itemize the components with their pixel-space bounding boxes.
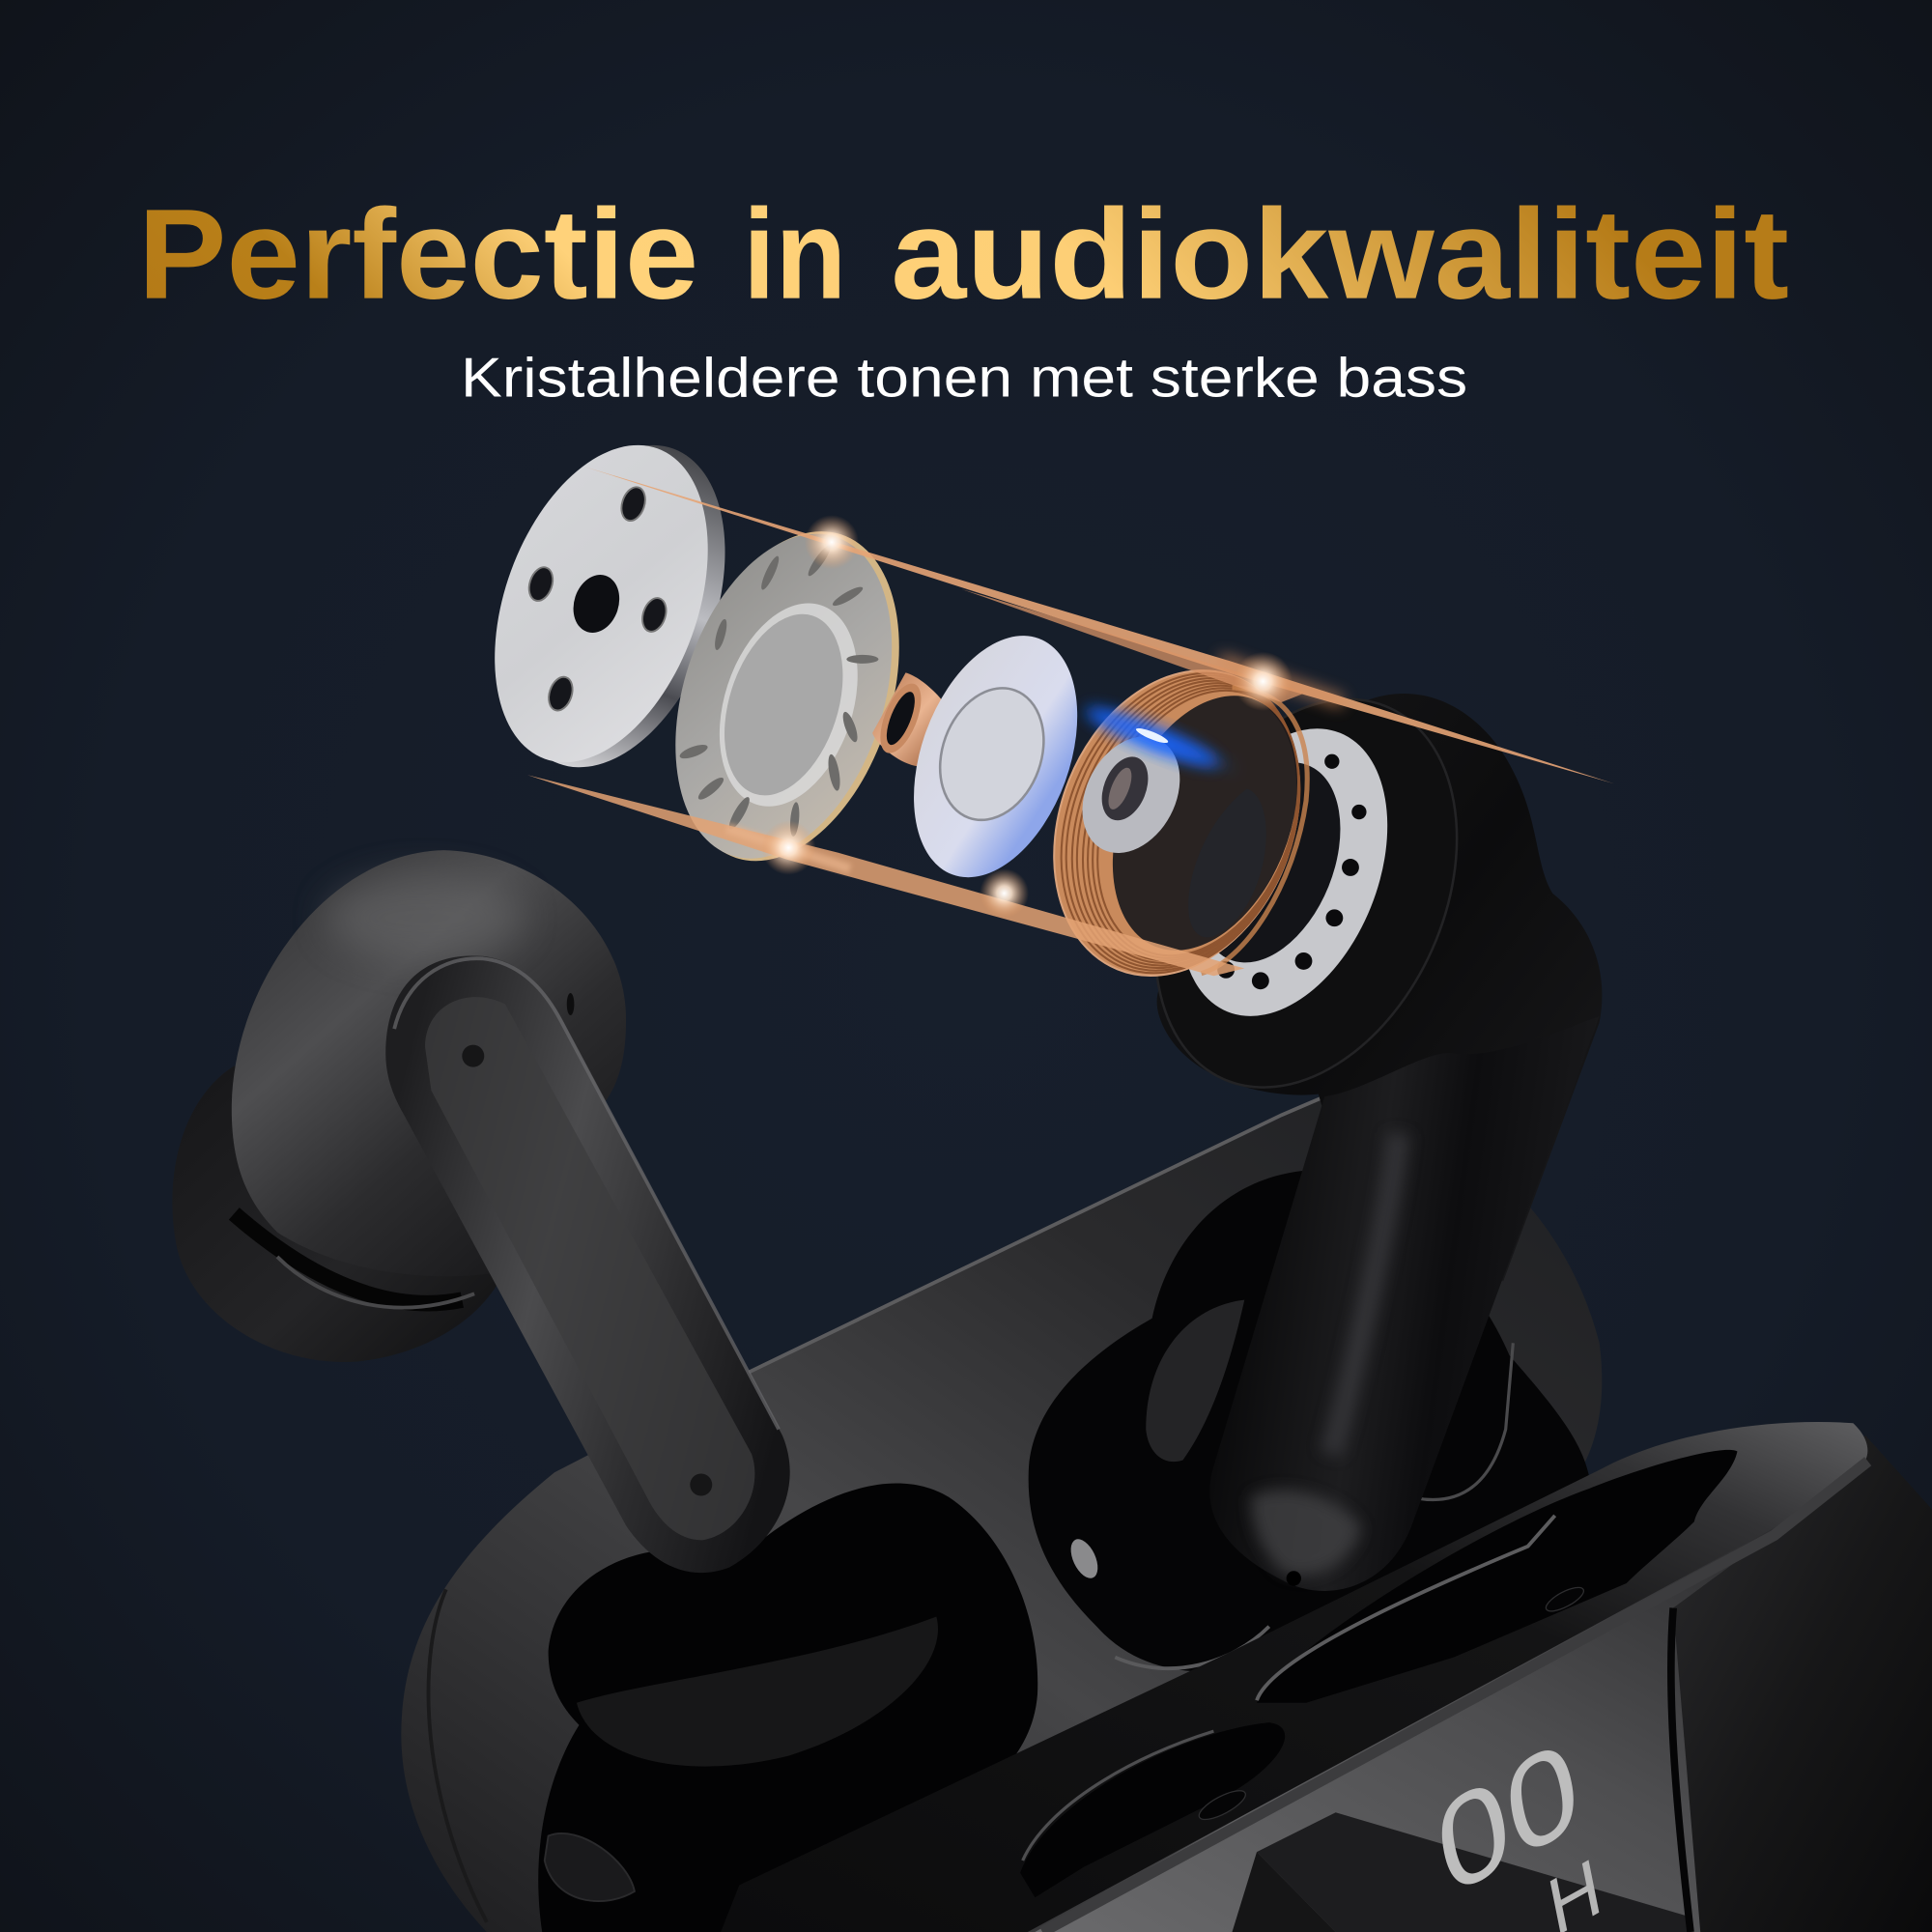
earbud head [1157,694,1602,1282]
rear earbud slot [1257,1450,1737,1703]
copper voice coil [1010,634,1343,1012]
charging case base [721,1422,1932,1932]
right cavity [1029,1171,1589,1672]
stem sensor dots [462,1045,484,1067]
plate seen through coil [1188,788,1266,937]
silver ring [1063,720,1199,870]
front earbud slot [1020,1722,1285,1897]
right cavity small vent [1065,1535,1103,1582]
left cavity highlight [577,1616,938,1767]
earbud stem [1209,1016,1600,1591]
disc fins [678,543,878,837]
glow points [805,515,859,569]
right cavity rim line [1115,1627,1269,1668]
right cavity highlight [1146,1300,1244,1462]
divider groove [1671,1608,1690,1932]
copper light beams [527,467,1614,976]
sound port [1287,1571,1301,1586]
left cavity [538,1483,1037,1932]
tray latch marks [1543,1583,1587,1616]
coil front arc [1202,688,1307,974]
copper cylinder [872,672,955,766]
silver perforated disc [455,415,766,797]
earbud head [232,850,626,1276]
earbud stem [385,955,790,1573]
ear tip [172,1065,499,1362]
white dome disc [883,613,1108,900]
right earbud [1097,651,1602,1591]
title: in [743,184,846,327]
front face [1035,1466,1865,1932]
right side face [1673,1435,1932,1932]
perforated driver plate [1141,697,1427,1047]
title: audiokwaliteit [891,184,1789,327]
rim edge [1042,1462,1868,1932]
LED battery digits: 00 [1426,1712,1590,1924]
display panel [1257,1812,1690,1932]
title: Perfectie [138,184,698,327]
top tray [721,1422,1867,1932]
ribbed diaphragm disc [637,503,938,890]
left cavity lower bud detail [545,1833,635,1901]
left earbud [172,850,790,1573]
charging case lid [401,1096,1602,1932]
driver housing ring [1097,651,1515,1135]
blue flare [1081,698,1238,775]
subtitle: Kristalheldere tonen met sterke bass [461,348,1467,410]
